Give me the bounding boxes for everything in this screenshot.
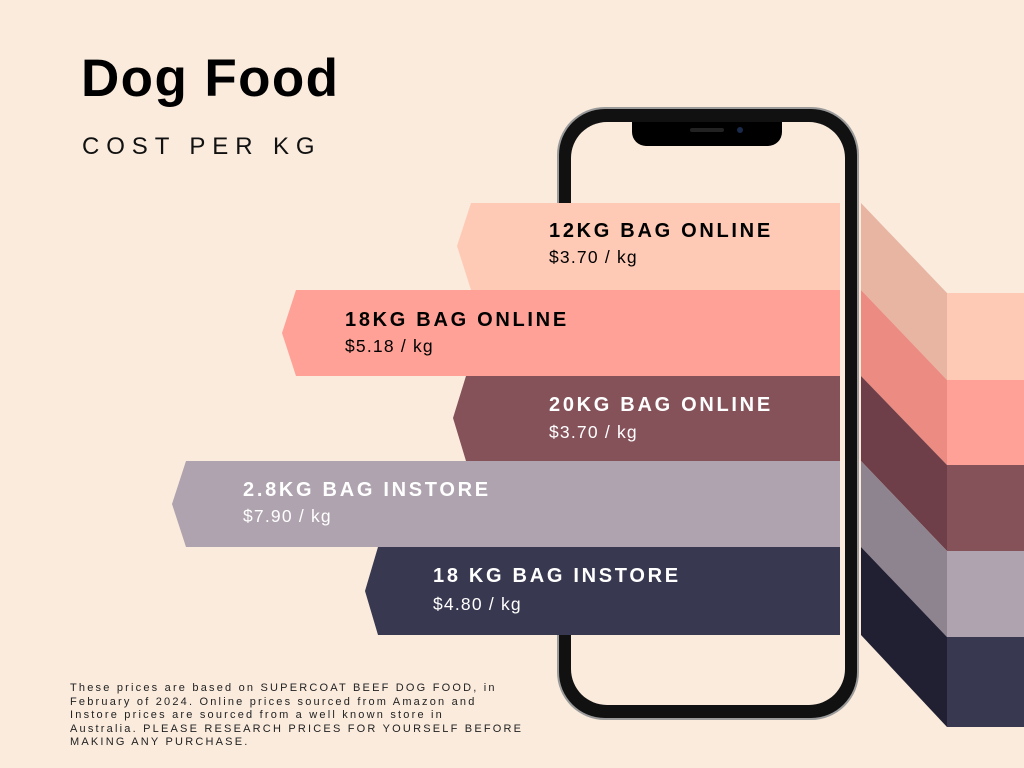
footnote: These prices are based on SUPERCOAT BEEF DOG FOOD, in <box>70 682 497 694</box>
3D side faces <box>861 203 1024 727</box>
band 1 label <box>549 220 773 267</box>
band 5 label: $4.80 / kg <box>433 594 522 614</box>
band 3 label <box>549 394 773 442</box>
band 1 label: $3.70 / kg <box>549 247 638 267</box>
band 5 label: 18 KG BAG INSTORE <box>433 565 681 587</box>
band 4 label <box>243 479 491 526</box>
subtitle: COST PER KG <box>82 133 322 160</box>
band 3 label: 20KG BAG ONLINE <box>549 394 773 416</box>
band 2 label: $5.18 / kg <box>345 336 434 356</box>
band 3 label: $3.70 / kg <box>549 422 638 442</box>
band 1 label: 12KG BAG ONLINE <box>549 220 773 242</box>
footnote: Australia. PLEASE RESEARCH PRICES FOR YOURSELF BEFORE <box>70 722 523 734</box>
title: Dog Food <box>81 49 339 108</box>
band 2 label: 18KG BAG ONLINE <box>345 309 569 331</box>
band 4 label: 2.8KG BAG INSTORE <box>243 479 491 501</box>
band 4 label: $7.90 / kg <box>243 506 332 526</box>
bands <box>172 203 840 635</box>
band 2 label <box>345 309 569 356</box>
footnote: MAKING ANY PURCHASE. <box>70 736 250 748</box>
phone <box>557 107 859 720</box>
footnote <box>70 682 523 748</box>
footnote: Instore prices are sourced from a well known store in <box>70 709 444 721</box>
footnote: February of 2024. Online prices sourced from Amazon and <box>70 696 477 708</box>
band 5 label <box>433 565 681 614</box>
